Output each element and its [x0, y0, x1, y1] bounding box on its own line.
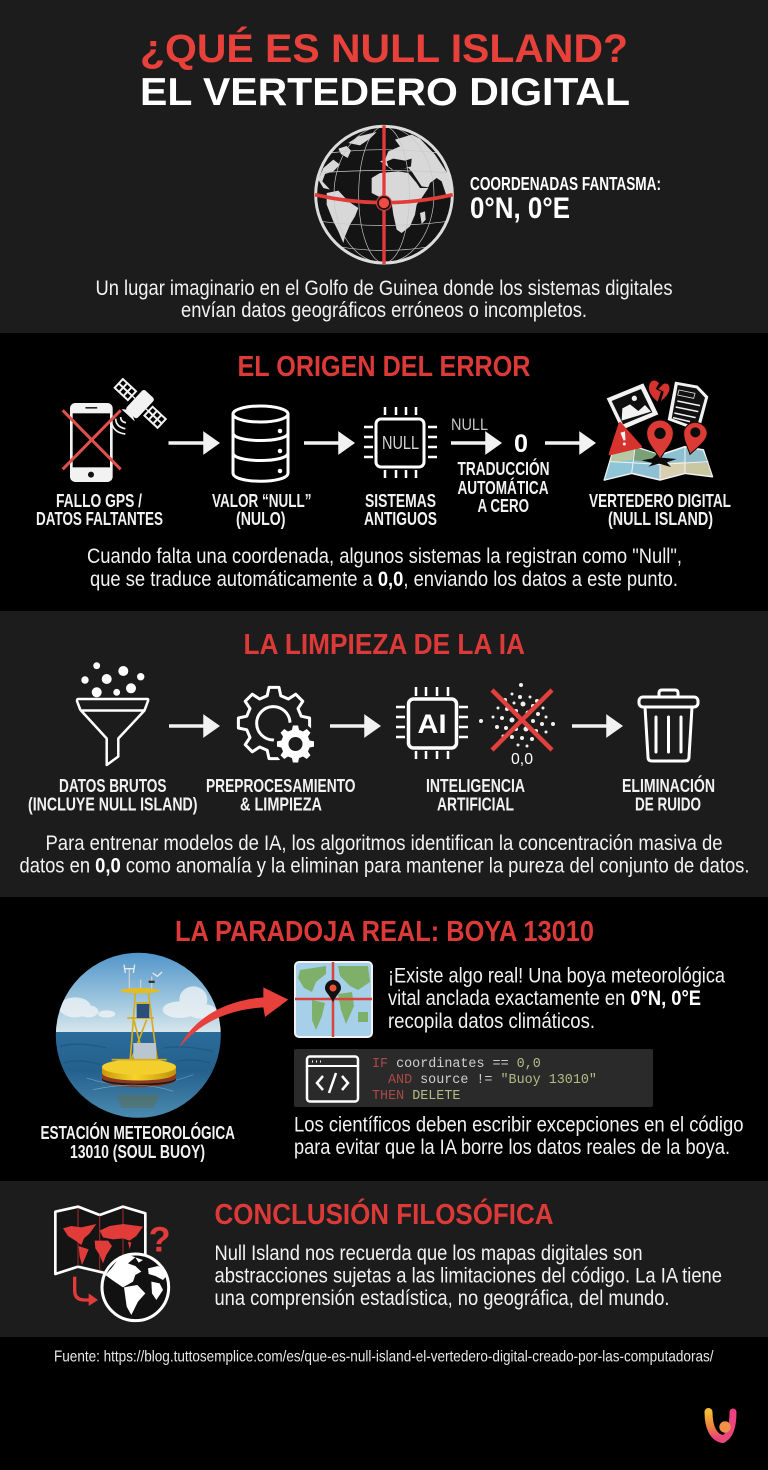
- icon: crossed data cluster: 0,0: [511, 751, 533, 768]
- text: buoy exists: [388, 964, 725, 1033]
- icon: ai chip: [396, 687, 468, 759]
- text: limpieza: [20, 832, 750, 878]
- text: conclusion: una comprensión estadística, no geográfica, del mundo.: [214, 1287, 670, 1310]
- labels: origen: (NULL ISLAND): [608, 509, 713, 529]
- labels: limpieza: ARTIFICIAL: [437, 794, 514, 814]
- null to zero arrow: [451, 415, 528, 458]
- labels: origen: (NULO): [236, 509, 286, 529]
- text: conclusion: Null Island nos recuerda que los mapas digitales son: [214, 1242, 642, 1265]
- icon: digital dump: [604, 380, 712, 480]
- text: origen: Cuando falta una coordenada, algunos sistemas la registran como "Null",: [87, 545, 682, 568]
- null to zero arrow: 0: [514, 430, 528, 458]
- arrow 5: [169, 718, 217, 734]
- labels: limpieza: ELIMINACIÓN: [622, 775, 715, 796]
- code box: THEN DELETE: [372, 1089, 460, 1104]
- labels: limpieza: (INCLUYE NULL ISLAND): [28, 794, 198, 814]
- icon: gears: [238, 687, 318, 766]
- labels: origen: ANTIGUOS: [364, 509, 437, 529]
- photo: weather buoy: [55, 951, 222, 1118]
- heading: conclusion: CONCLUSIÓN FILOSÓFICA: [214, 1197, 554, 1231]
- arrow: red curved: [179, 987, 288, 1047]
- labels: origen: TRADUCCIÓN: [458, 458, 550, 479]
- icon: map and globe: ?: [149, 1221, 171, 1260]
- coordinates label: COORDENADAS FANTASMA:: [470, 174, 661, 194]
- labels: origen: FALLO GPS /: [56, 491, 142, 511]
- labels: origen: SISTEMAS: [365, 491, 436, 511]
- title: [140, 26, 630, 114]
- labels: limpieza: DE RUIDO: [635, 794, 701, 814]
- labels: limpieza: INTELIGENCIA: [426, 776, 525, 796]
- panel: la paradoja real: [41, 920, 743, 1162]
- logo: [708, 1412, 733, 1439]
- labels: limpieza: & LIMPIEZA: [240, 794, 322, 814]
- labels: limpieza: PREPROCESAMIENTO: [206, 776, 356, 796]
- icon: chip null: NULL: [382, 433, 419, 453]
- arrow 4: [545, 434, 593, 452]
- panel: el origen del error: [0, 333, 768, 611]
- caption: buoy: 13010 (SOUL BUOY): [70, 1142, 205, 1162]
- title: EL VERTEDERO DIGITAL: [140, 71, 630, 114]
- text: conclusion: [214, 1242, 722, 1310]
- icon: chip null: [364, 407, 437, 478]
- labels: origen: [36, 458, 731, 529]
- intro text: Un lugar imaginario en el Golfo de Guinea donde los sistemas digitales: [96, 277, 672, 300]
- intro text: envían datos geográficos erróneos o incompletos.: [181, 299, 587, 322]
- icon: code window: [307, 1056, 358, 1102]
- heading: paradoja: LA PARADOJA REAL: BOYA 13010: [175, 916, 594, 948]
- labels: origen: VALOR “NULL”: [212, 491, 312, 511]
- labels: origen: A CERO: [478, 496, 529, 516]
- text: origen: que se traduce automáticamente a 0,0, enviando los datos a este punto.: [90, 568, 678, 591]
- coordinates label: [470, 174, 661, 225]
- labels: limpieza: [28, 775, 715, 814]
- icon: trash can: [639, 690, 698, 761]
- icon: database: [233, 406, 288, 481]
- text: buoy exists: vital anclada exactamente en 0°N, 0°E: [388, 987, 701, 1010]
- caption: buoy: [40, 1122, 235, 1162]
- arrow 6: [330, 718, 378, 734]
- code box: AND source != "Buoy 13010": [388, 1073, 597, 1088]
- icon: globe with crosshair: [315, 125, 453, 264]
- arrow 1: [168, 434, 217, 452]
- icon: phone and satellite: [63, 374, 171, 482]
- arrow 2: [304, 434, 352, 452]
- text: origen: [87, 545, 682, 591]
- icon: map and globe: [55, 1207, 171, 1321]
- icon: ai chip: AI: [418, 709, 446, 739]
- title: ¿QUÉ ES NULL ISLAND?: [140, 26, 628, 71]
- code box: IF coordinates == 0,0: [372, 1057, 541, 1072]
- heading: origen: EL ORIGEN DEL ERROR: [238, 351, 531, 383]
- heading: limpieza: LA LIMPIEZA DE LA IA: [244, 629, 525, 661]
- labels: origen: DATOS FALTANTES: [36, 509, 163, 529]
- labels: limpieza: DATOS BRUTOS: [59, 776, 166, 796]
- intro text: [96, 277, 672, 322]
- labels: origen: AUTOMÁTICA: [458, 477, 549, 498]
- text: buoy exists: ¡Existe algo real! Una boya meteorológica: [388, 964, 725, 988]
- coordinates label: 0°N, 0°E: [470, 192, 570, 225]
- panel: la limpieza de la ia: [0, 611, 768, 897]
- panel: header: [0, 0, 768, 333]
- icon: funnel: [77, 662, 148, 765]
- panel: conclusion: [0, 1181, 768, 1337]
- code box: [294, 1049, 653, 1107]
- caption: buoy: ESTACIÓN METEOROLÓGICA: [40, 1122, 235, 1143]
- text: buoy exists: recopila datos climáticos.: [388, 1010, 595, 1033]
- icon: crossed data cluster: [479, 683, 555, 768]
- null to zero arrow: NULL: [451, 415, 488, 434]
- text: exceptions: [294, 1114, 744, 1159]
- arrow 7: [572, 718, 620, 734]
- icon: map with pin: [295, 962, 372, 1037]
